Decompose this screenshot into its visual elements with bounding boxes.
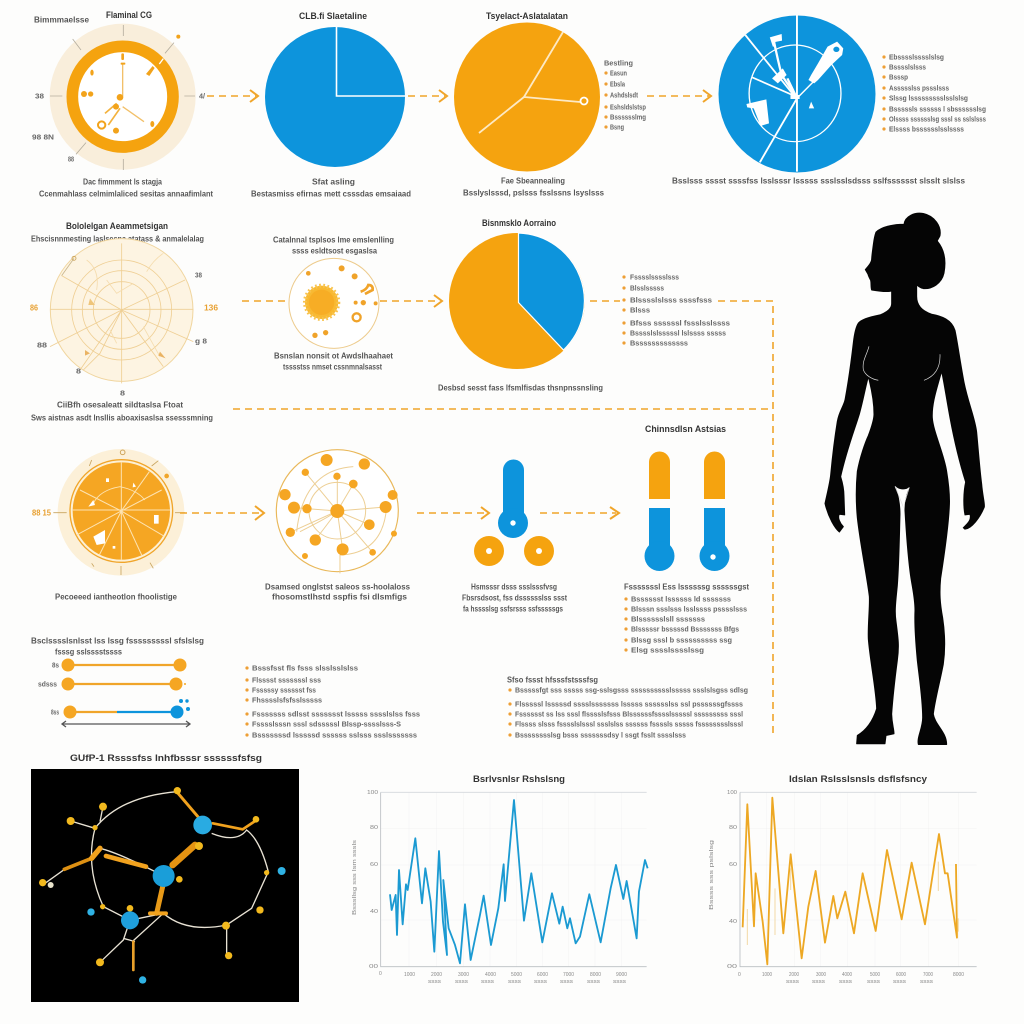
caption above: ssss esldtsost esgaslsa [292, 246, 378, 256]
line chart [740, 792, 977, 967]
panel: receptor molecule [31, 753, 299, 1002]
legend list: Bsssslslsssssl lslssss sssss [630, 328, 726, 338]
tick labels: 8 [76, 366, 81, 376]
connector: dashed path to silhouette [233, 301, 773, 735]
heading: left label: Bimmmaelsse [34, 16, 90, 24]
caption: fa hsssslsg ssfsrsss ssfsssssgs [463, 604, 563, 614]
heading: Bsrlvsnlsr Rshslsng [473, 774, 565, 784]
heading: clock title: Flaminal CG [106, 10, 152, 20]
text list: right: Bsssssfgt sss sssss ssg-sslsgsss sssssssssslsssss ssslslsgss sdlsg [515, 686, 748, 694]
text list: middle: Bsssfsst fls fsss slsslsslslss [252, 664, 358, 672]
caption: Fae Sbeannealing [501, 176, 565, 186]
legend list: Slssg lssssssssslsslslsg [889, 94, 968, 102]
heading: Idslan Rslsslsnsls dsflsfsncy [789, 774, 927, 784]
panel: receptor icon [462, 460, 567, 614]
tick labels: 136 [204, 304, 219, 312]
panel: orange sector wheel [32, 449, 185, 576]
caption: Dac fimmment ls stagja [83, 178, 162, 186]
legend list: Bsssssslmg [610, 112, 646, 122]
caption: Fbsrsdsost, fss dsssssslss ssst [462, 594, 567, 602]
legend list: Bsssssls ssssss l sbsssssslsg [889, 104, 986, 114]
caption below: Bsnslan nonsit ot Awdslhaahaet [274, 352, 393, 360]
legend list: Blsslsssss [630, 284, 664, 292]
arrow [540, 507, 619, 519]
network circle [276, 450, 398, 573]
panel: cell diagram [273, 236, 394, 372]
tick labels: g 8 [195, 336, 207, 346]
legend list: Easun [610, 68, 627, 78]
axis labels: Bsssllsg sss lsm sssls [352, 839, 358, 915]
axis labels: 2000 [789, 972, 799, 978]
text list: middle: Bsssssssd lsssssd ssssss sslsss ssslsssssss [252, 730, 417, 740]
axis labels: 5000 [511, 972, 522, 978]
heading: Chinnsdlsn Astsias [645, 424, 726, 434]
axis labels: 6000 [537, 972, 548, 978]
pie chart with tools [718, 15, 876, 172]
arrow [242, 300, 288, 302]
text list: middle: Flsssst sssssssl sss [252, 676, 321, 684]
caption: Bestasmiss efirnas mett csssdas emsaiaad [251, 190, 411, 198]
text list: Blsssssr bsssssd Bsssssss Bfgs [631, 624, 739, 634]
heading: Bololelgan Aeammetsigan [66, 221, 168, 231]
legend list [882, 52, 986, 134]
axis labels: ssss [428, 979, 442, 985]
caption above [273, 236, 394, 256]
heading: GUfP-1 Rssssfss lnhfbsssr ssssssfsfsg [70, 753, 262, 763]
text list: Fsssssssl Ess lssssssg ssssssgst [624, 582, 749, 592]
icon: blue stem [498, 460, 528, 538]
tick labels: 4/ [199, 92, 206, 100]
heading [31, 636, 204, 656]
text list: right: Flssss slsss fsssslslsssl ssslslss ssssss fssssls sssss fsssssssslsssl [515, 720, 743, 728]
axis labels: 6000 [896, 972, 906, 978]
icon: orange discs [474, 536, 554, 566]
text list: middle: Fsssssss sdlsst ssssssst lsssss sssslslss fsss [252, 710, 420, 718]
text list: Elsg sssslsssslssg [631, 646, 704, 654]
tick labels: 98 8N [32, 132, 54, 142]
text list: Blsssn ssslsss lsslssss psssslsss [631, 604, 747, 614]
legend list [604, 58, 646, 132]
axis labels: 7000 [563, 972, 574, 978]
arrow [180, 506, 264, 520]
axis labels: 0 [738, 972, 741, 978]
text list: Blsssssslsll sssssss [631, 614, 705, 624]
legend list: Olssss sssssslsg sssl ss sslslsss [889, 114, 986, 124]
text list: right: Flsssssl lsssssd sssslsssssss lsssss sssssslss ssl pssssssgfssss [515, 700, 743, 708]
legend list: Blsss [630, 306, 650, 314]
axis labels: 3000 [458, 972, 469, 978]
legend list: Bfsss ssssssl fssslsslssss [630, 318, 730, 328]
legend list: Ashdslsdt [610, 90, 638, 100]
pie chart [265, 27, 405, 167]
tick labels [30, 270, 219, 398]
bar row 1 [52, 658, 186, 672]
panel: blue tools pie [672, 15, 986, 185]
panel: blue pie quarter [251, 11, 411, 198]
text list: middle: Fsssssy sssssst fss [252, 686, 316, 694]
double arrow axis [62, 721, 190, 727]
axis labels: 100 [367, 790, 378, 796]
axis labels: ssss [455, 979, 469, 985]
heading: CLB.fi Slaetaline [299, 11, 367, 21]
legend list [622, 272, 730, 348]
axis labels: Bssss sss pslslsg [709, 840, 715, 910]
panel: fasting clock diagram [32, 10, 213, 198]
axis labels: 8000 [590, 972, 601, 978]
legend list: Bsssp [889, 72, 908, 82]
caption [251, 178, 411, 198]
text list: right [507, 676, 748, 740]
caption below: tsssstss nmset cssnmnalsasst [283, 362, 382, 372]
caption: Dsamsed onglstst saleos ss-hoolaloss [265, 582, 411, 592]
axis labels: 40 [729, 919, 737, 925]
tick labels: 86 [30, 304, 38, 312]
legend list: Bestling [604, 58, 633, 68]
caption [31, 400, 213, 422]
axis labels: 9000 [616, 972, 627, 978]
axis labels [709, 790, 964, 985]
arrow [380, 295, 442, 307]
axis labels: 40 [370, 909, 378, 915]
icon: cell [289, 258, 379, 348]
axis labels: 1000 [404, 972, 415, 978]
axis labels: 1000 [762, 972, 772, 978]
axis labels: 00 [369, 964, 378, 970]
arrow [207, 90, 258, 102]
tick label: 88 15 [32, 508, 52, 518]
caption: CiiBfh osesaleatt sildtaslsa Ftoat [57, 400, 183, 410]
axis labels: 2000 [431, 972, 442, 978]
caption: fhosomstlhstd sspfis fsi dlsmfigs [272, 592, 408, 602]
arrow [408, 90, 447, 102]
bar row 3 [51, 699, 190, 718]
heading: Bisnmsklo Aorraino [482, 218, 556, 228]
tick labels: 8 [120, 388, 125, 398]
axis labels: 00 [727, 964, 737, 970]
panel: network diagram [265, 450, 411, 602]
axis labels: 60 [729, 862, 737, 868]
axis labels: ssss [920, 979, 934, 985]
caption [39, 178, 213, 198]
axis labels: 100 [727, 790, 737, 796]
axis labels: 5000 [870, 972, 880, 978]
panel: paired capsules [624, 424, 749, 654]
legend list: Ebsla [610, 80, 626, 88]
caption: Ccenmahlass celmimlaliced sesitas annaafimlant [39, 190, 213, 198]
text list: right: Sfso fssst hfsssfstsssfsg [507, 676, 598, 684]
panel: orange line chart [709, 774, 977, 985]
caption above: Catalnnal tsplsos lme emslenlling [273, 236, 394, 244]
axis labels: ssss [613, 979, 627, 985]
text list: right: Bsssssssslsg bsss sssssssdsy l ssgt fsslt sssslsss [515, 730, 686, 740]
text list: Blssg sssl b ssssssssss ssg [631, 636, 732, 644]
arrow [417, 507, 489, 519]
axis labels: ssss [587, 979, 601, 985]
text list: Bsssssst lssssss ld sssssss [631, 594, 731, 604]
arrow [647, 90, 711, 102]
pie chart [454, 22, 600, 172]
heading: Tsyelact-Aslatalatan [486, 11, 568, 21]
legend list: Ebsssslsssslslsg [889, 52, 944, 62]
icon: left capsule [644, 452, 674, 571]
caption [265, 582, 411, 602]
caption: Bsslyslsssd, pslsss fsslssns lsyslsss [463, 188, 605, 198]
bar row 2 [38, 678, 186, 690]
panel: blue line chart [352, 774, 648, 985]
caption: Sfat asling [312, 178, 355, 186]
axis labels: ssss [893, 979, 907, 985]
axis labels: 3000 [816, 972, 826, 978]
legend list: Blsssslslsss ssssfsss [630, 296, 712, 304]
panel: two-part pie [438, 218, 730, 392]
text list [624, 582, 749, 654]
text list: middle: Fsssslsssn sssl sdsssssl Blssp-sssslsss-S [252, 720, 401, 728]
panel: polar assessment diagram [30, 221, 219, 422]
wheel diagram [53, 449, 185, 576]
legend list: Bsssssssssssss [630, 338, 688, 348]
caption: Hsmsssr dsss ssslsssfvsg [471, 582, 557, 592]
text list: middle [245, 664, 420, 740]
legend list: Bsng [610, 122, 624, 132]
text list: middle: Fhsssslsfsfsslsssss [252, 696, 322, 704]
polar chart [50, 239, 193, 383]
caption: Desbsd sesst fass lfsmlfisdas thsnpnssnsling [438, 384, 603, 392]
legend list: Bsssslslsss [889, 62, 926, 72]
axis labels: 80 [370, 825, 378, 831]
figure: human silhouette [825, 213, 984, 744]
axis labels: ssss [812, 979, 826, 985]
axis labels: ssss [839, 979, 853, 985]
axis labels: 60 [370, 862, 378, 868]
text list: right: Fsssssst ss lss sssl flsssslsfsss Blssssssfsssslsssssl sssssssss sssl [515, 710, 743, 718]
caption [463, 176, 605, 198]
icon: clock dial [50, 24, 196, 170]
bar row 3: 8ss [51, 708, 59, 716]
axis labels: 0 [379, 971, 382, 977]
molecule diagram [31, 769, 299, 1002]
caption below [274, 352, 393, 372]
axis labels: 4000 [842, 972, 852, 978]
heading: Bsclsssslsnlsst lss lssg fsssssssssl sfslslsg [31, 636, 204, 646]
subheading: Ehscisnnmesting laslsesna atatass & anmalelalag [31, 234, 204, 244]
tick labels: 38 [195, 270, 202, 280]
legend list: Eshsldslstsp [610, 102, 646, 112]
tick labels [32, 92, 206, 164]
axis labels: ssss [508, 979, 522, 985]
axis labels: 7000 [923, 972, 933, 978]
bar row 1: 8s [52, 660, 59, 670]
axis labels: 80 [729, 825, 737, 831]
caption [462, 582, 567, 614]
tick labels: 88 [68, 154, 74, 164]
axis labels: ssss [560, 979, 574, 985]
caption: Pecoeeed iantheotlon fhoolistige [55, 592, 178, 602]
axis labels: ssss [481, 979, 495, 985]
axis labels: ssss [534, 979, 548, 985]
line chart [381, 792, 648, 967]
icon: right capsule [700, 452, 730, 571]
legend list: Elssss bsssssslsslssss [889, 124, 964, 134]
caption: Sws aistnas asdt lnsllis aboaxisaslsa ssesssmning [31, 414, 213, 422]
caption: Bsslsss sssst ssssfss lsslsssr lsssss ssslsslsdsss sslfsssssst slsslt slslss [672, 176, 966, 186]
pie chart [449, 233, 585, 369]
axis labels [352, 790, 627, 985]
panel: timeline bars [31, 636, 204, 727]
axis labels: 8000 [953, 972, 964, 978]
legend list: Fsssslsssslsss [630, 272, 679, 282]
legend list: Assssslss pssslsss [889, 84, 949, 92]
tick labels: 38 [35, 92, 44, 100]
axis labels: 4000 [485, 972, 496, 978]
panel: orange pie [454, 11, 646, 198]
axis labels: ssss [867, 979, 881, 985]
heading: fsssg sslsssstssss [55, 648, 123, 656]
axis labels: ssss [786, 979, 800, 985]
tick labels: 88 [37, 340, 47, 350]
bar row 2: sdsss [38, 680, 57, 688]
